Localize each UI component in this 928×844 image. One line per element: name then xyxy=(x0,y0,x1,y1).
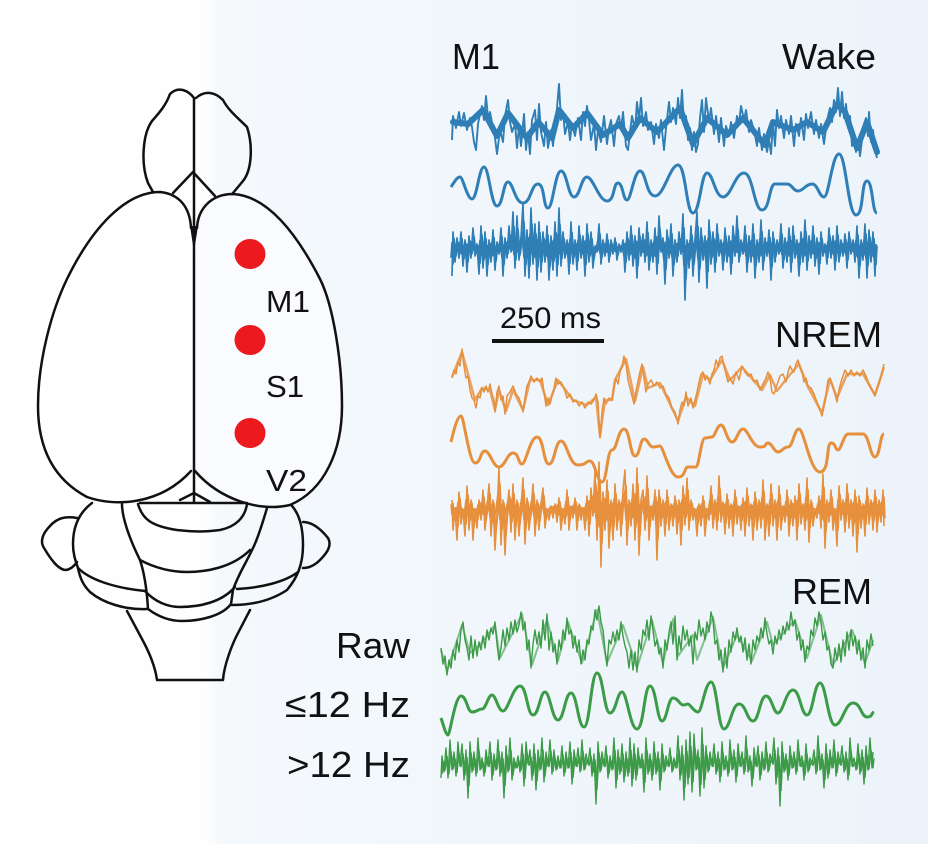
nrem high-pass xyxy=(451,462,885,567)
row labels: Raw xyxy=(336,625,411,666)
site labels: S1 xyxy=(266,369,304,404)
wake high-pass xyxy=(451,204,877,300)
midline xyxy=(190,98,198,493)
brain diagram xyxy=(38,90,342,680)
olfactory bulbs xyxy=(143,90,251,196)
headings: M1 xyxy=(452,36,500,77)
left hemisphere xyxy=(38,192,191,502)
wake traces xyxy=(451,84,877,300)
headings: NREM xyxy=(775,314,882,355)
row labels: >12 Hz xyxy=(287,744,410,785)
scale bar: 250 ms xyxy=(500,302,601,335)
headings xyxy=(452,36,882,612)
row labels: ≤12 Hz xyxy=(285,684,410,725)
NREM traces xyxy=(451,349,885,567)
REM traces xyxy=(441,606,874,806)
cerebellum and brainstem xyxy=(42,493,330,680)
rem filtered xyxy=(441,673,874,735)
recording sites xyxy=(234,239,266,448)
row labels xyxy=(285,625,411,785)
site labels: V2 xyxy=(266,463,307,498)
headings: Wake xyxy=(782,36,876,77)
wake raw xyxy=(452,84,877,158)
nrem raw xyxy=(452,349,884,438)
rem high-pass xyxy=(441,728,874,806)
nrem filtered xyxy=(451,416,884,482)
site labels xyxy=(266,284,310,498)
site labels: M1 xyxy=(266,284,310,319)
wake filtered xyxy=(451,154,877,215)
rem raw xyxy=(441,606,873,675)
right hemisphere xyxy=(195,194,342,507)
headings: REM xyxy=(792,571,872,612)
